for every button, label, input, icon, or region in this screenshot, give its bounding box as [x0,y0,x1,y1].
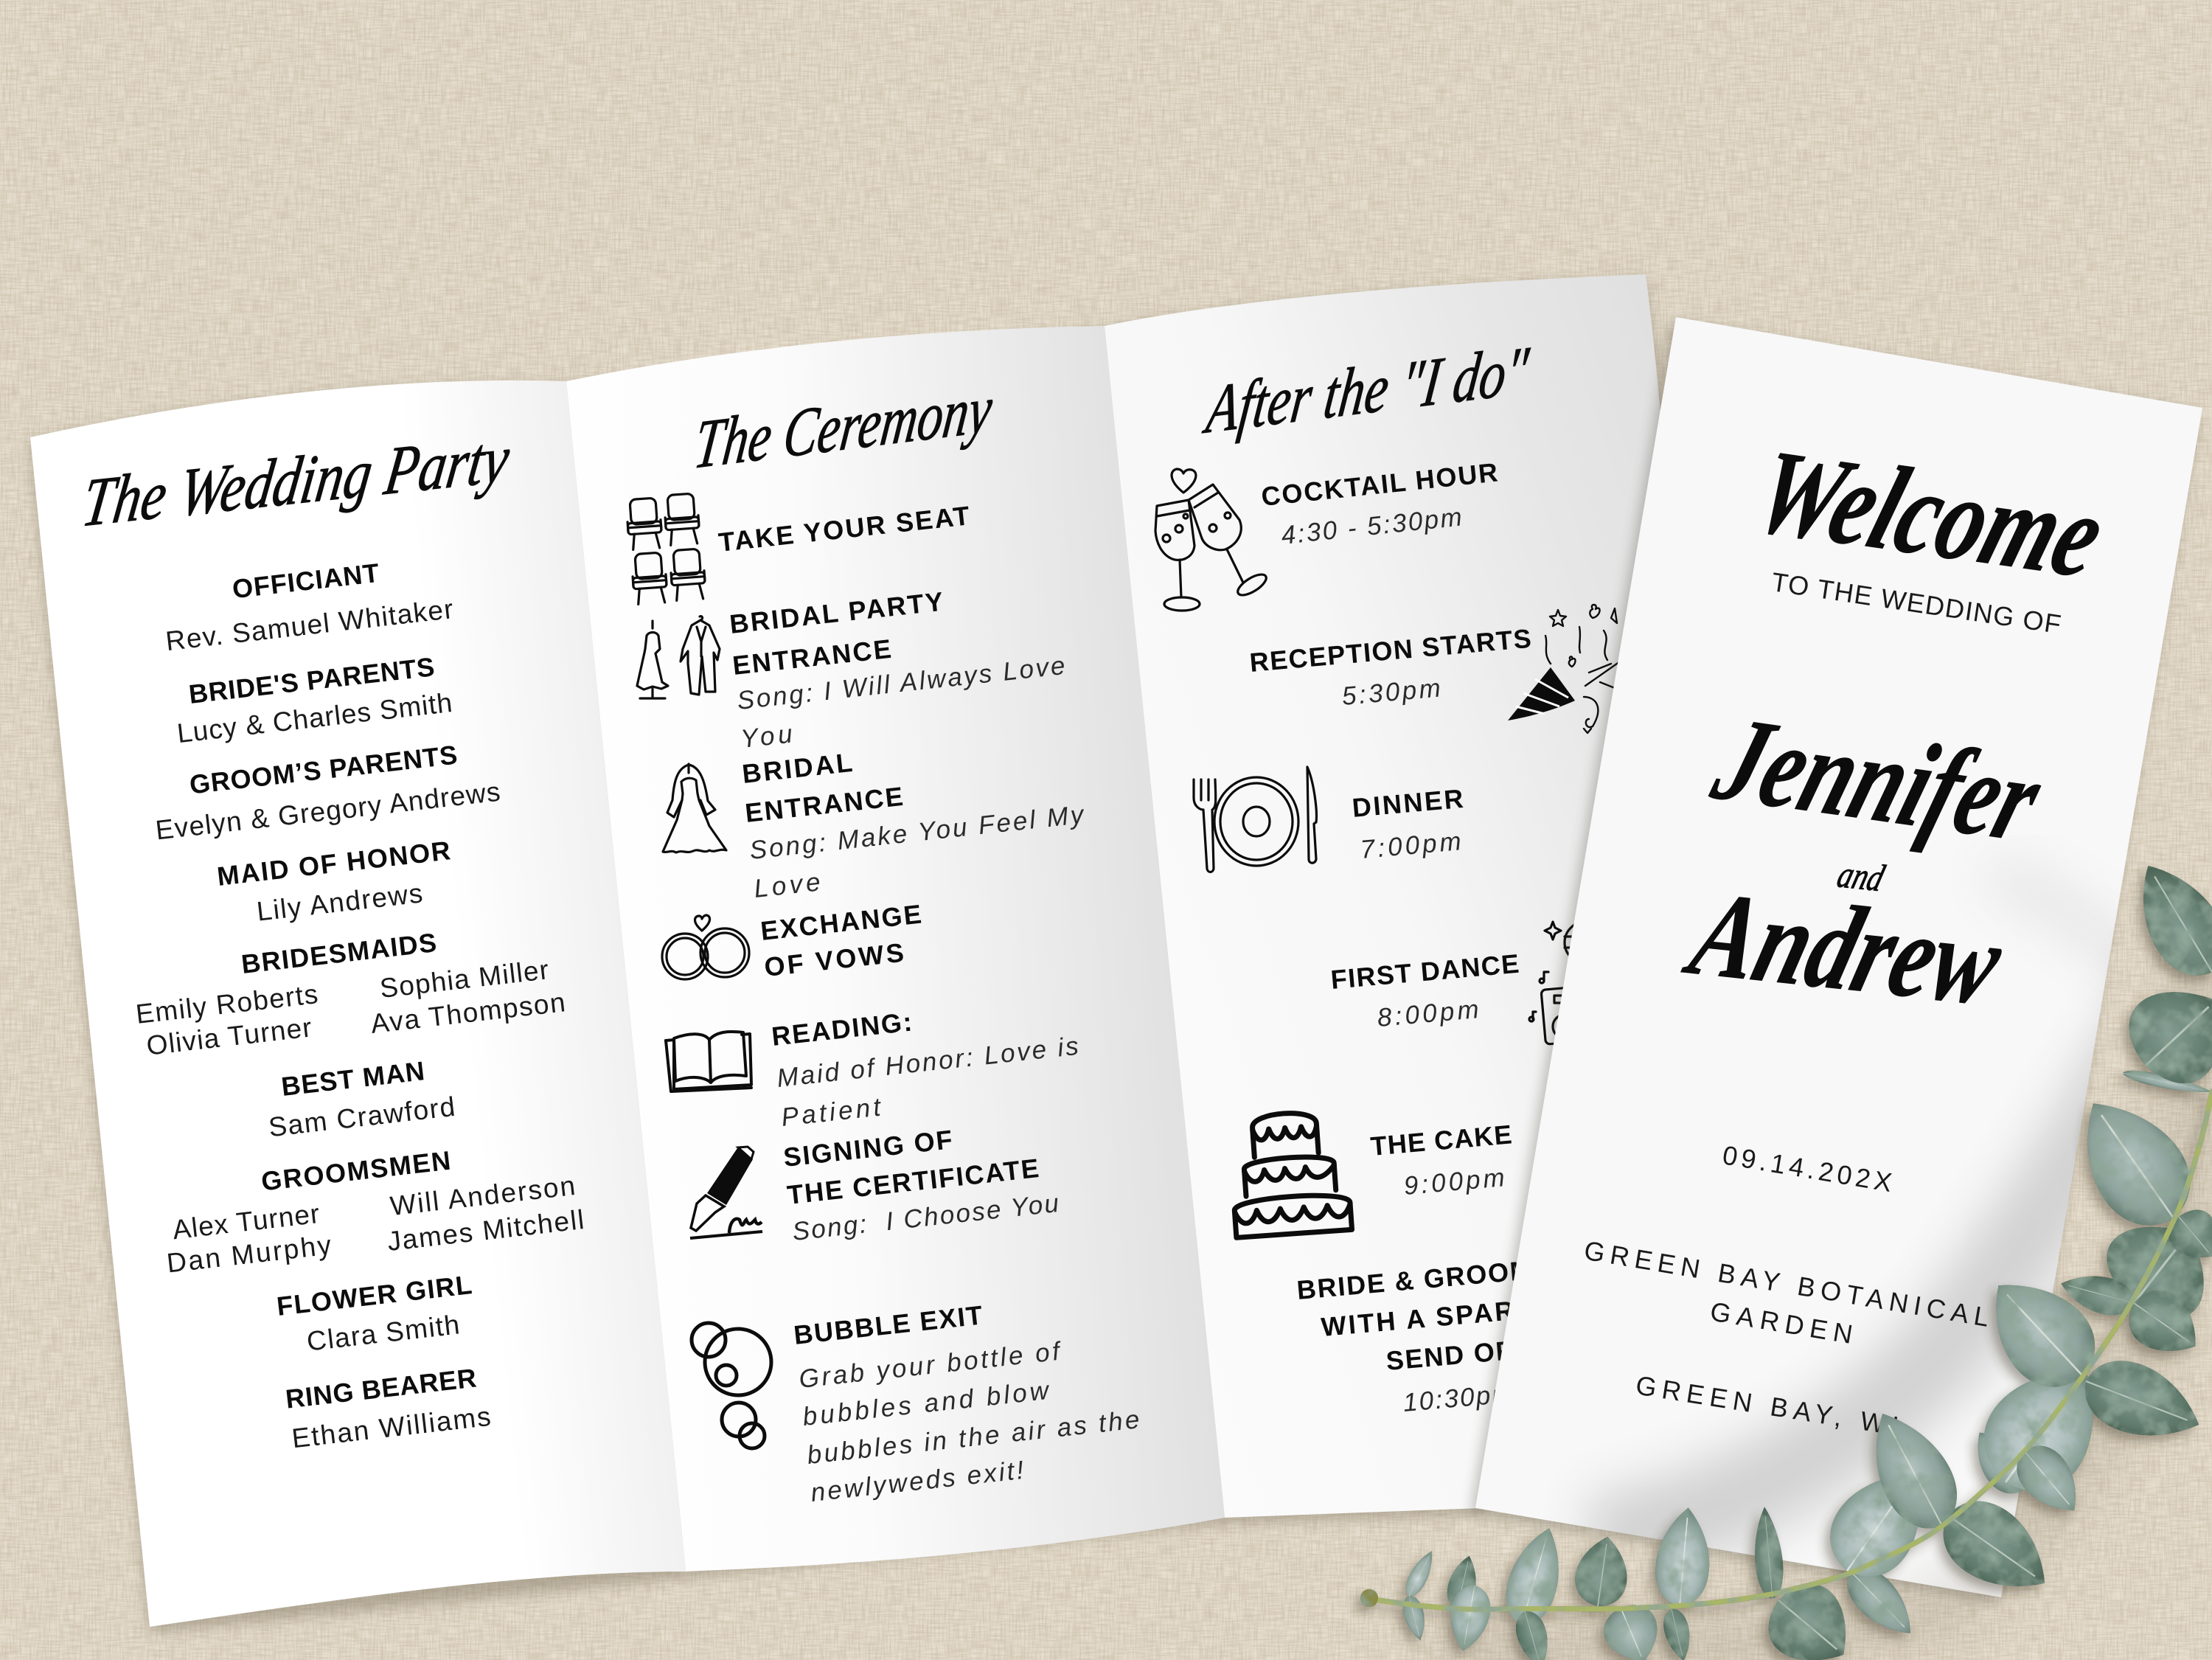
bubble exit: newlyweds exit! [810,1456,1025,1507]
bride and groom send off [1295,1254,1596,1417]
icon: disco ball and speaker [1529,922,1606,1044]
venue: GREEN BAY BOTANICAL [1582,1235,1992,1333]
panel: the wedding party [30,381,686,1627]
reading: Maid of Honor: Love is [776,1032,1079,1093]
reception starts: RECEPTION STARTS [1248,623,1532,678]
bride and groom send off: 10:30pm [1402,1379,1514,1417]
cocktail hour: 4:30 - 5:30pm [1280,502,1463,550]
bubble exit: bubbles and blow [801,1376,1052,1431]
first dance: FIRST DANCE [1329,948,1520,995]
take your seat: TAKE YOUR SEAT [717,500,971,558]
bridal entrance [740,747,1087,903]
icon: wedding cake [1228,1109,1352,1237]
reception starts: 5:30pm [1340,673,1441,711]
bud [1360,1589,1378,1607]
groomsmen: Dan Murphy [165,1229,333,1279]
bubble exit: bubbles in the air as the [806,1405,1141,1470]
the cake: THE CAKE [1369,1119,1513,1161]
bridesmaids: Olivia Turner [145,1012,313,1061]
and: and [1833,853,1889,900]
groomsmen: GROOMSMEN [260,1145,452,1197]
icon: book [666,1032,751,1091]
venue: GARDEN [1708,1296,1855,1350]
bride's parents [175,651,453,749]
icon: champagne glasses [1155,469,1269,611]
bridal party entrance: Song: I Will Always Love [736,651,1066,715]
bride's parents: BRIDE'S PARENTS [187,651,436,709]
panel: the ceremony [566,326,1225,1572]
first dance [1329,948,1520,1032]
maid of honor [215,835,452,927]
bride and groom send off: SEND OFF [1385,1333,1531,1376]
dinner [1351,783,1464,864]
ring bearer [284,1362,493,1454]
bridal entrance: Song: Make You Feel My [748,800,1087,865]
icon: bubbles [692,1323,771,1448]
best man [267,1055,456,1142]
icon: plate and cutlery [1194,767,1316,872]
exchange of vows: EXCHANGE [759,899,923,946]
eucalyptus shadow on fabric [1438,929,2212,1659]
best man: Sam Crawford [267,1091,456,1142]
eucalyptus branch [1360,848,2212,1660]
the cake [1369,1119,1513,1201]
groomsmen: James Mitchell [386,1204,585,1257]
bridal party entrance: BRIDAL PARTY [728,586,945,639]
bridal party entrance [728,586,1066,754]
exchange of vows: OF VOWS [762,937,905,982]
dinner: 7:00pm [1359,827,1462,864]
card shadow [1471,322,2198,1602]
first dance: 8:00pm [1376,995,1480,1032]
signing of the certificate: Song: I Choose You [791,1189,1060,1246]
bubble exit: BUBBLE EXIT [792,1299,984,1350]
groomsmen: Will Anderson [389,1170,577,1221]
bridal party entrance: You [740,720,793,754]
heading: After the I do: After the "I do" [1199,333,1533,448]
groomsmen [165,1145,585,1279]
bridal entrance: BRIDAL [740,747,854,789]
signing of the certificate: SIGNING OF [782,1124,954,1173]
bridesmaids: Emily Roberts [134,979,319,1029]
flower girl [275,1269,473,1357]
flower girl: Clara Smith [305,1309,461,1357]
stem [1369,1091,2212,1609]
bubble exit [792,1299,1141,1507]
bridesmaids: Ava Thompson [369,987,567,1039]
date: 09.14.202X [1720,1139,1894,1198]
name: Andrew: Andrew [1673,867,2017,1029]
heading: The Ceremony: The Ceremony [690,371,997,484]
reading: READING: [770,1007,914,1052]
icon: chairs [626,493,706,605]
reading [770,1007,1079,1132]
bubble exit: Grab your bottle of [798,1336,1063,1394]
bridesmaids [134,927,567,1061]
officiant: Rev. Samuel Whitaker [164,594,455,656]
soft shadow under folded program [30,279,1665,1633]
to the wedding of: TO THE WEDDING OF [1770,566,2063,639]
bridal party entrance: ENTRANCE [731,633,893,681]
location: GREEN BAY, WI [1634,1369,1901,1441]
officiant [164,558,455,656]
cocktail hour: COCKTAIL HOUR [1260,457,1499,512]
leaves [1399,848,2212,1660]
bride and groom send off: BRIDE & GROOM [1295,1254,1533,1305]
ring bearer: Ethan Williams [291,1401,493,1454]
heading: The Wedding Party: The Wedding Party [78,420,514,541]
maid of honor: Lily Andrews [255,878,424,927]
bridesmaids: Sophia Miller [378,954,550,1004]
groom's parents [154,740,501,846]
bridesmaids: BRIDESMAIDS [240,927,438,979]
ring bearer: RING BEARER [284,1362,478,1414]
flower girl: FLOWER GIRL [275,1269,473,1322]
icon: dress and suit [637,617,720,698]
signing of the certificate: THE CERTIFICATE [785,1153,1040,1210]
cocktail hour [1260,457,1499,550]
best man: BEST MAN [279,1055,426,1102]
the cake: 9:00pm [1402,1163,1506,1201]
bride and groom send off: WITH A SPARKLER [1320,1288,1596,1342]
dinner: DINNER [1351,783,1464,823]
icon: rings [662,915,749,979]
bridal entrance: Love [753,867,821,903]
officiant: OFFICIANT [231,558,380,604]
groomsmen: Alex Turner [171,1198,321,1245]
name: Jennifer: Jennifer [1700,692,2057,867]
icon: fountain pen signing [690,1147,762,1238]
panel: after the I do [1105,274,1660,1518]
bride's parents: Lucy & Charles Smith [175,687,453,749]
exchange of vows [759,899,923,982]
reading: Patient [780,1092,883,1132]
foliage shadow on card [1573,872,2115,1555]
groom's parents: GROOM’S PARENTS [188,740,459,800]
bridal entrance: ENTRANCE [743,781,905,828]
icon: bride [663,764,726,852]
panel: welcome card [1475,317,2212,1597]
icon: party popper [1508,605,1622,733]
groom's parents: Evelyn & Gregory Andrews [154,777,501,846]
reception starts [1248,623,1532,711]
signing of the certificate [782,1124,1060,1246]
maid of honor: MAID OF HONOR [215,835,452,892]
